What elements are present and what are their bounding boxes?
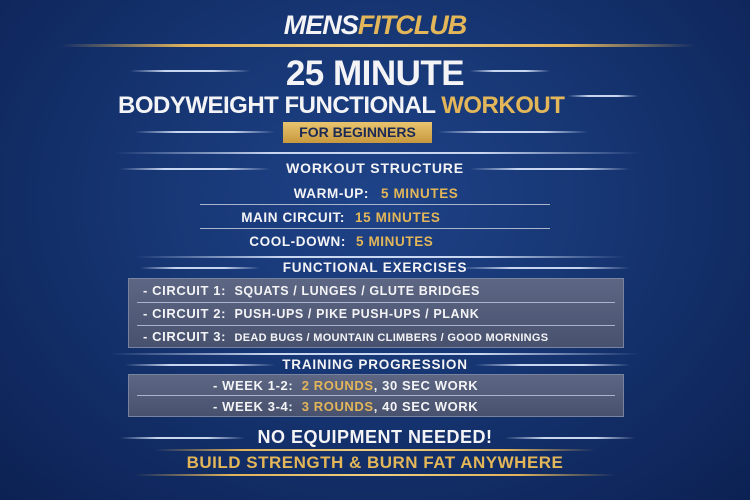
structure rows: 5 MINUTES bbox=[381, 186, 458, 201]
panel: progression: - WEEK 1-2: 2 ROUNDS, 30 SEC WORK bbox=[213, 378, 478, 393]
panel: circuits: - CIRCUIT 1: SQUATS / LUNGES / GLUTE BRIDGES bbox=[143, 283, 480, 298]
panel: progression: - WEEK 3-4: 3 ROUNDS, 40 SEC WORK bbox=[213, 399, 478, 414]
title: 25 minute: 25 MINUTE bbox=[286, 54, 464, 93]
structure rows: 15 MINUTES bbox=[355, 210, 441, 225]
badge: for beginners bbox=[283, 122, 432, 143]
panel: circuits: - CIRCUIT 2: PUSH-UPS / PIKE PUSH-UPS / PLANK bbox=[143, 306, 479, 321]
structure rows: 5 MINUTES bbox=[356, 234, 433, 249]
panel: circuits bbox=[128, 278, 624, 348]
tagline: BUILD STRENGTH & BURN FAT ANYWHERE bbox=[187, 453, 563, 472]
heading: workout structure: WORKOUT STRUCTURE bbox=[286, 160, 464, 176]
structure rows bbox=[200, 186, 550, 249]
subtitle: BODYWEIGHT FUNCTIONAL WORKOUT bbox=[118, 92, 564, 119]
logo: MENSFITCLUB bbox=[284, 10, 466, 40]
panel: circuits: - CIRCUIT 3: DEAD BUGS / MOUNTAIN CLIMBERS / GOOD MORNINGS bbox=[143, 329, 548, 344]
heading: training progression: TRAINING PROGRESSION bbox=[282, 357, 468, 372]
badge: for beginners: FOR BEGINNERS bbox=[299, 124, 416, 140]
heading: functional exercises: FUNCTIONAL EXERCISES bbox=[283, 260, 467, 275]
structure rows: MAIN CIRCUIT: bbox=[241, 210, 345, 225]
callout: no equipment: NO EQUIPMENT NEEDED! bbox=[257, 427, 493, 447]
structure rows: COOL-DOWN: bbox=[249, 234, 346, 249]
structure rows: WARM-UP: bbox=[294, 186, 369, 201]
panel: progression bbox=[128, 374, 624, 417]
